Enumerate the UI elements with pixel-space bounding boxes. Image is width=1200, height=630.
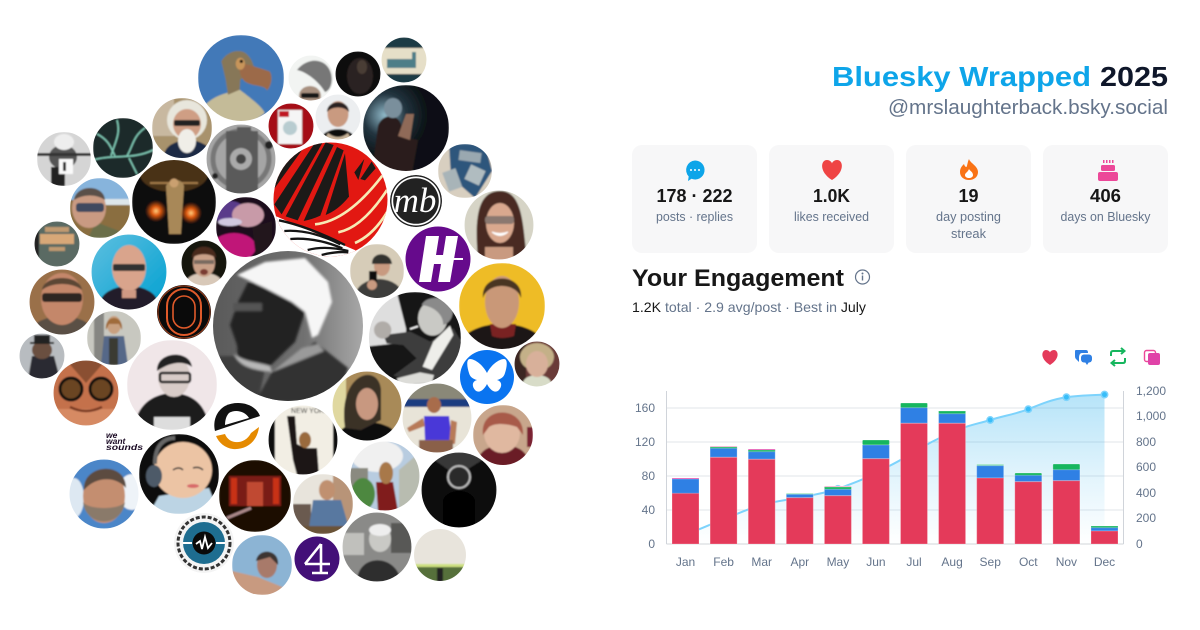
stat card: posts and replies: 178 · 222 (656, 186, 732, 206)
right axis labels: 1,200 (1136, 384, 1166, 398)
avatar: sonicstate logo (174, 513, 234, 573)
bar: May (824, 486, 851, 544)
handle: @mrslaughterback.bsky.social (888, 97, 1168, 119)
right axis labels: 600 (1136, 460, 1156, 474)
heading: Your Engagement: Your Engagement (632, 265, 844, 292)
avatar: man in blue shirt (402, 383, 472, 453)
avatar: man in webcam (182, 240, 226, 286)
cumulative dots (797, 391, 1108, 501)
month labels: Sep (980, 555, 1001, 569)
avatar: painted figure (232, 535, 292, 595)
avatar: writer with cigarette (365, 292, 463, 384)
stat card: days on Bluesky: days on Bluesky (1060, 209, 1151, 224)
avatar: hoodie man in greyscale (342, 512, 412, 582)
avatar: blue background bald man (92, 234, 166, 310)
avatar: woman in blazer (87, 311, 141, 365)
avatar: channel 4 logo (294, 536, 340, 582)
icon: reposts legend arrows (1111, 348, 1125, 366)
avatar: dark hair portrait (335, 51, 381, 97)
left axis labels: 160 (635, 401, 655, 415)
avatar: e logo (214, 403, 260, 449)
left axis labels: 40 (642, 503, 655, 517)
icon: quotes legend copies (1144, 350, 1160, 365)
stat card: likes received (769, 145, 894, 253)
month labels: Nov (1056, 555, 1077, 569)
title: Bluesky Wrapped (832, 61, 1091, 92)
avatar: sculpture and sunglasses (288, 56, 334, 100)
avatar: green veins (93, 118, 153, 178)
right axis labels: 200 (1136, 511, 1156, 525)
avatar: smiling man with glasses (70, 178, 130, 238)
cumulative line (686, 395, 1104, 534)
stat card: days on Bluesky (1043, 145, 1168, 253)
avatar: beard man with glasses (152, 98, 212, 158)
avatar: dodo (198, 35, 284, 125)
icon: flame (960, 159, 978, 180)
month labels: Jun (866, 555, 886, 569)
bar: Apr (786, 493, 813, 544)
avatar: we want sounds text: we (106, 430, 118, 440)
avatar: yellow background man (459, 263, 545, 349)
month labels: Jan (676, 555, 695, 569)
chart axes (666, 391, 1124, 544)
icon: info (856, 270, 870, 284)
bar: Jan (672, 478, 699, 544)
avatar: we want sounds text (106, 430, 143, 452)
avatar: we want sounds text: sounds (106, 442, 143, 452)
month labels (676, 555, 1115, 569)
avatar: woman smiling with glasses (464, 190, 534, 260)
month labels: Oct (1019, 555, 1038, 569)
bar: Feb (710, 446, 737, 544)
icon: speech bubble (686, 160, 705, 181)
avatar: child with red hair (473, 405, 533, 465)
avatar: mb logo: mb (394, 181, 436, 220)
bar: Aug (939, 411, 966, 544)
bar: Nov (1053, 464, 1080, 544)
stat card: likes received: likes received (794, 209, 869, 224)
title (832, 61, 1168, 92)
left axis labels: 80 (642, 469, 655, 483)
avatar: big black and white profile (213, 251, 363, 402)
month labels: Mar (751, 555, 772, 569)
month labels: Jul (906, 555, 922, 569)
legend icons (1042, 348, 1160, 366)
right axis labels: 0 (1136, 537, 1143, 551)
title: 2025 (1100, 61, 1168, 92)
avatar: denim shirt man (293, 474, 353, 534)
avatar: black and white man with hoodie (127, 340, 217, 430)
stat card: day posting streak (906, 145, 1031, 253)
avatar: singer on stage (363, 85, 449, 173)
cumulative area (686, 395, 1104, 544)
avatar: purple H logo (405, 226, 471, 292)
avatar: New Yorker man: NEW YORK (291, 408, 329, 415)
left axis labels (635, 401, 655, 551)
bar: Dec (1091, 526, 1118, 544)
icon: replies legend bubbles (1075, 350, 1092, 365)
left axis labels: 0 (648, 537, 655, 551)
avatar: round glasses close-up (53, 360, 119, 426)
icon: likes legend heart (1042, 350, 1058, 365)
avatar: bluesky butterfly (460, 350, 514, 404)
stat card: day posting streak: 19 (958, 186, 979, 206)
avatar: long dark hair man (332, 372, 402, 440)
stat card: posts and replies (632, 145, 757, 253)
bar: Oct (1015, 473, 1042, 544)
right axis labels: 400 (1136, 486, 1156, 500)
avatar: bear in suit (19, 333, 65, 379)
avatar: cassette tapes (438, 144, 492, 198)
avatar: organ on stage (219, 460, 291, 532)
avatar: woman in clouds (350, 440, 420, 511)
chart gridlines (666, 408, 1124, 510)
avatar: older woman (514, 342, 560, 386)
avatar: mb logo (390, 175, 442, 227)
avatar: teal logo (381, 37, 427, 83)
right axis labels: 1,000 (1136, 409, 1166, 423)
avatar: buddha with headphones (139, 434, 219, 514)
avatar: halo silhouette (421, 452, 497, 528)
month labels: Apr (790, 555, 809, 569)
stat card: day posting streak: day posting (936, 209, 1001, 224)
avatar: man headshot (316, 94, 360, 140)
month labels: Dec (1094, 555, 1115, 569)
avatar: engraved hand (206, 124, 276, 194)
engagement summary: 1.2K total · 2.9 avg/post · Best in July (632, 299, 866, 315)
chart: engagement by month (635, 384, 1166, 569)
avatar: beard man under sky (64, 459, 146, 529)
bar: Mar (748, 449, 775, 544)
avatar: presentation screen (413, 528, 467, 582)
stat card: likes received: 1.0K (813, 186, 850, 206)
avatar: bottom left man with glasses (30, 270, 94, 334)
bar: Sep (977, 464, 1004, 544)
avatar: orange O logo (157, 285, 211, 339)
avatar: hat man with phone (350, 244, 404, 298)
left axis labels: 120 (635, 435, 655, 449)
right axis labels (1136, 384, 1166, 551)
stat card: day posting streak: streak (951, 226, 986, 241)
month labels: Feb (713, 555, 734, 569)
month labels: May (827, 555, 849, 569)
avatar: New Yorker man (268, 405, 338, 475)
stat card: days on Bluesky: 406 (1090, 186, 1121, 206)
bar: Jun (862, 440, 889, 544)
icon: heart (822, 160, 842, 180)
avatar: we want sounds text: want (106, 436, 127, 446)
right axis labels: 800 (1136, 435, 1156, 449)
avatar: child on motorbike (37, 132, 91, 186)
bar: Jul (900, 403, 928, 544)
avatar: red and black stripes (274, 142, 388, 256)
month labels: Aug (941, 555, 963, 569)
avatar cloud (19, 35, 560, 595)
avatar: flame dress (132, 156, 216, 244)
stat card: posts and replies: posts · replies (656, 209, 733, 224)
avatar: pink smoke (216, 197, 276, 257)
avatar: red cd box (268, 103, 314, 149)
avatar: grey box labels (34, 221, 80, 267)
icon: cake (1098, 160, 1118, 181)
